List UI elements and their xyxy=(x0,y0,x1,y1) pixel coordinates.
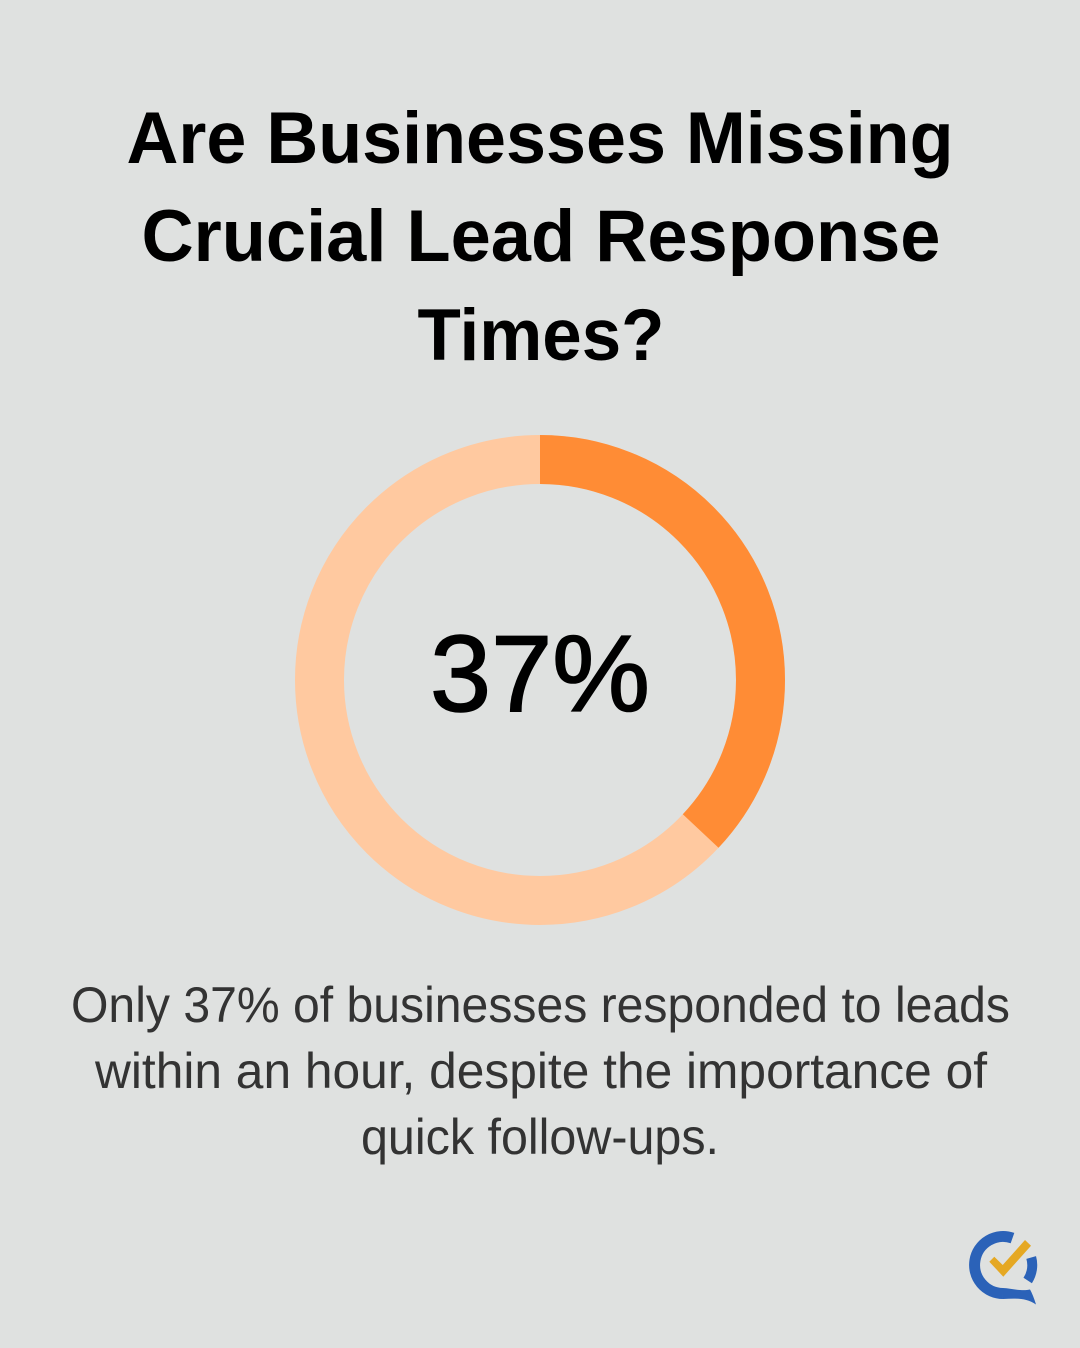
donut value: 37% xyxy=(430,613,650,735)
title: Are Businesses Missing xyxy=(126,98,954,179)
description text xyxy=(71,977,1010,1165)
title xyxy=(126,98,954,376)
title: Times? xyxy=(418,295,664,376)
description text: quick follow-ups. xyxy=(361,1109,719,1165)
icon: logo chat bubble with check xyxy=(975,1237,1036,1304)
title: Crucial Lead Response xyxy=(142,196,940,277)
donut chart: 37% xyxy=(320,460,760,900)
description text: Only 37% of businesses responded to leads xyxy=(71,977,1010,1033)
description text: within an hour, despite the importance of xyxy=(94,1043,987,1099)
